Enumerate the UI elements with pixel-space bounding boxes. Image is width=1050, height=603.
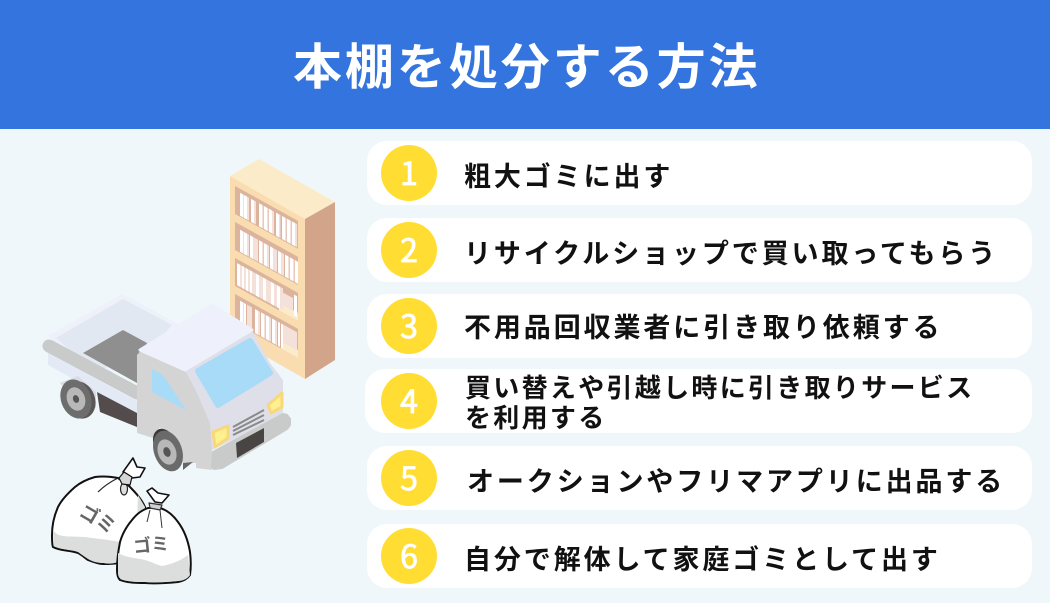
panel: method 1 bbox=[367, 141, 1032, 205]
panel: method 4 bbox=[365, 369, 1032, 433]
panel: method 5: 5 bbox=[400, 454, 418, 500]
title: 本棚を処分する方法 bbox=[293, 41, 761, 95]
panel: method 2 bbox=[367, 218, 1032, 282]
panel: method 1: 粗大ゴミに出す bbox=[464, 162, 673, 192]
panel: method 6 bbox=[367, 524, 1032, 588]
panel: method 6: 自分で解体して家庭ゴミとして出す bbox=[464, 545, 941, 575]
illustration: bookshelf, truck and garbage bags bbox=[42, 159, 335, 584]
panel: method 3: 3 bbox=[400, 302, 418, 348]
label: gomi: ゴミ bbox=[75, 497, 121, 539]
panel: method 4: 4 bbox=[400, 377, 418, 423]
panel: method 4: 買い替えや引越し時に引き取りサービス bbox=[465, 373, 974, 403]
panel: method 6: 6 bbox=[400, 532, 418, 578]
panel: method 5 bbox=[367, 446, 1032, 510]
icon: bookshelf bbox=[230, 159, 335, 379]
panel: method 4: を利用する bbox=[465, 403, 607, 433]
panel: method 3: 不用品回収業者に引き取り依頼する bbox=[464, 313, 942, 343]
panel: method 3 bbox=[367, 294, 1032, 358]
label: gomi: ゴミ bbox=[132, 529, 170, 559]
icon: garbage bag back bbox=[52, 458, 150, 564]
panel: method 2: 2 bbox=[400, 226, 418, 272]
panel: method 5: オークションやフリマアプリに出品する bbox=[467, 467, 1005, 497]
icon: truck bbox=[48, 294, 290, 476]
icon: garbage bag front bbox=[117, 488, 191, 583]
header band bbox=[0, 0, 1050, 129]
panel: method 1: 1 bbox=[400, 149, 418, 195]
panel: method 2: リサイクルショップで買い取ってもらう bbox=[464, 239, 998, 269]
